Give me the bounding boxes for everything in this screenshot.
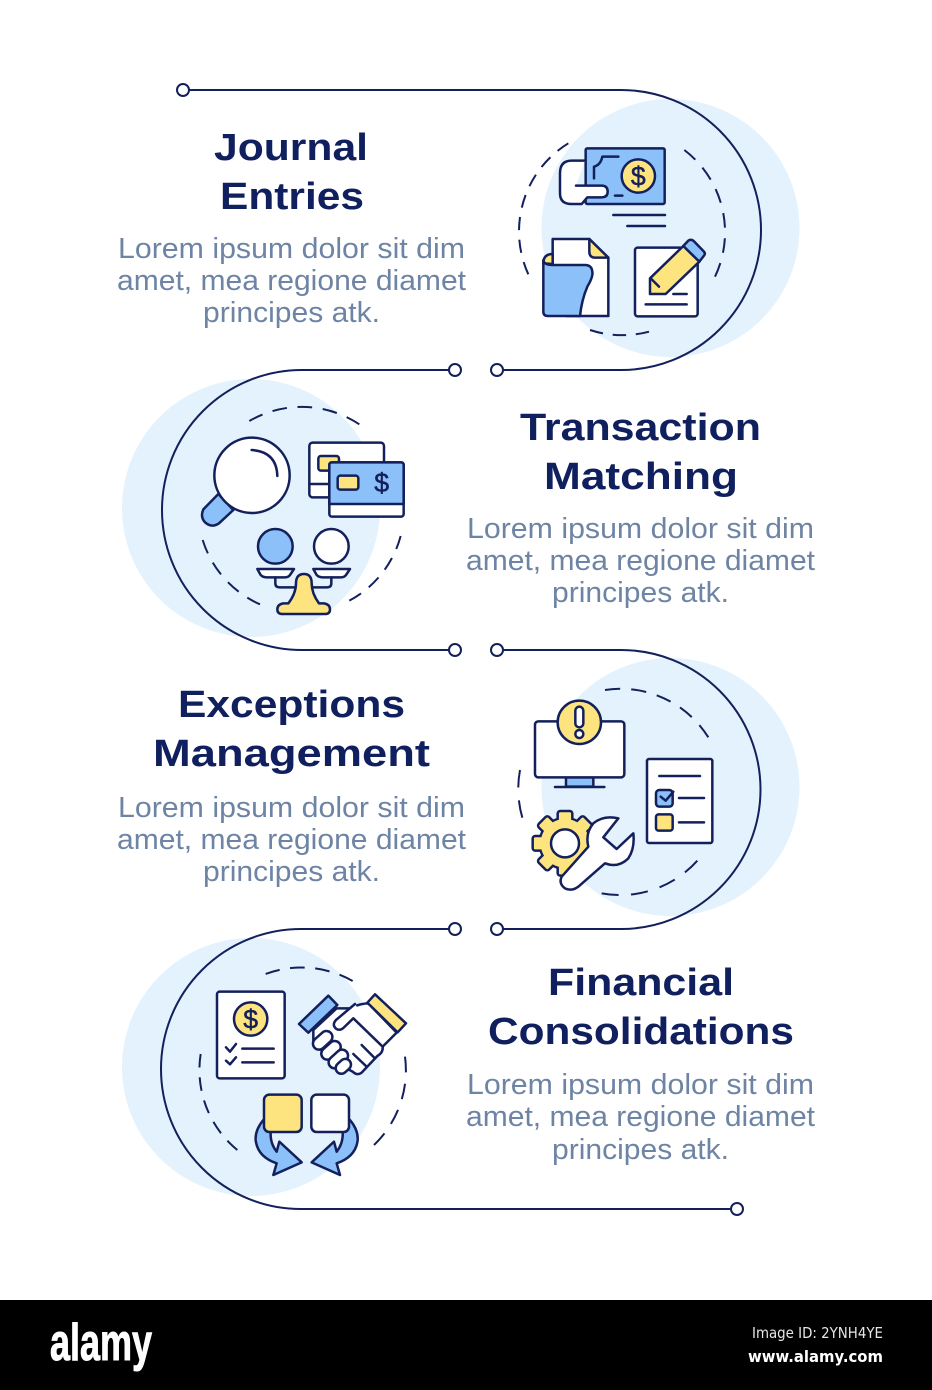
heading: journal entries [214,127,368,218]
text block: transaction matching: Lorem ipsum dolor sit dim [467,513,814,545]
footer bar [0,1300,932,1390]
text block: exceptions management: amet, mea regione diamet [117,824,466,856]
text block: exceptions management: principes atk. [203,856,380,888]
notepad and pencil [635,240,705,316]
icon: financial consolidations [199,968,406,1175]
heading: financial consolidations: Financial [548,962,734,1004]
heading: journal entries: Journal [214,127,368,169]
panel: transaction matching text [466,407,815,609]
credit cards: $ [374,468,389,498]
text block: transaction matching [466,513,815,609]
heading: transaction matching: Transaction [520,407,761,449]
text block: journal entries: principes atk. [203,297,380,329]
icon: exceptions management [518,689,712,895]
heading: exceptions management: Management [153,733,430,775]
website: www.alamy.com [748,1347,883,1366]
heading: journal entries: Entries [220,176,364,218]
heading: financial consolidations: Consolidations [488,1011,794,1053]
text block: transaction matching: principes atk. [552,577,729,609]
panel: journal entries text [117,127,466,329]
banknote and hand: $ [631,161,646,191]
credit cards [309,443,404,517]
dashed ring [203,407,401,604]
financial document: $ [243,1004,258,1034]
dashed ring [518,689,708,895]
light blue circles [122,99,800,1196]
connector line: step 1 [177,84,761,376]
monitor with alert [535,701,624,787]
magnifying glass [202,438,290,526]
checklist [647,759,712,843]
text block: financial consolidations: amet, mea regione diamet [466,1101,815,1133]
balance scale [257,529,350,614]
text block: transaction matching: amet, mea regione diamet [466,545,815,577]
text block: journal entries: amet, mea regione diamet [117,265,466,297]
panel: financial consolidations text [466,962,815,1166]
text block: financial consolidations [466,1069,815,1166]
text block: journal entries: Lorem ipsum dolor sit dim [118,233,465,265]
dashed ring [199,968,406,1150]
heading: exceptions management: Exceptions [178,684,405,726]
financial document [217,992,285,1078]
image id: Image ID: 2YNH4YE [752,1324,883,1342]
icon: transaction matching [202,407,404,614]
icon: journal entries [519,143,725,335]
folder and document [543,239,608,316]
watermark logo: alamy [50,1314,152,1372]
connector line: step 2 [162,364,461,656]
heading: transaction matching [520,407,761,498]
connector line: step 4 [161,923,743,1215]
heading: transaction matching: Matching [544,456,738,498]
text block: exceptions management [117,792,466,888]
dashed ring [519,143,725,335]
handshake [299,994,406,1076]
banknote and hand [560,148,665,226]
heading: exceptions management [153,684,430,775]
text block: financial consolidations: principes atk. [552,1134,729,1166]
exchange arrows and squares [256,1095,358,1175]
heading: financial consolidations [488,962,794,1053]
text block: exceptions management: Lorem ipsum dolor sit dim [118,792,465,824]
connector line: step 3 [491,644,760,935]
text block: financial consolidations: Lorem ipsum dolor sit dim [467,1069,814,1101]
text block: journal entries [117,233,466,329]
gear and wrench [533,811,634,890]
panel: exceptions management text [117,684,466,888]
